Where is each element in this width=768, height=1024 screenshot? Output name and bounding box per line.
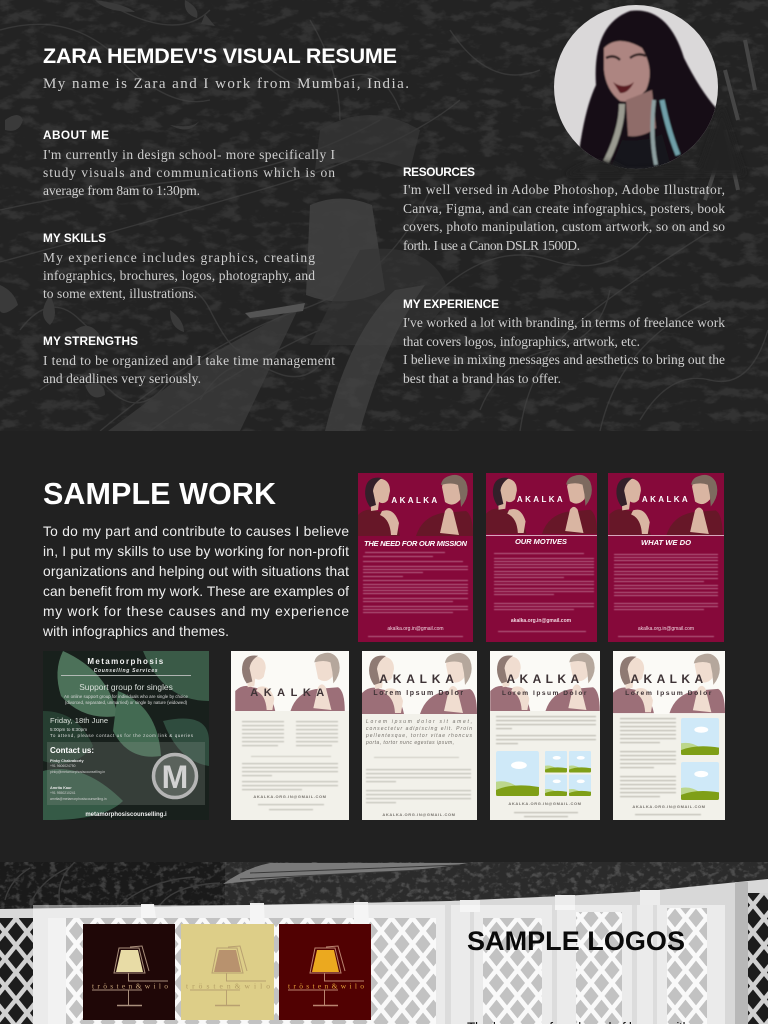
text block: my strengths: MY STRENGTHS (43, 334, 138, 348)
poster: our motives: OUR MOTIVES (515, 537, 567, 546)
poster: metamorphosis: Amrita Kaur (50, 786, 72, 790)
poster: cream layout 4: AKALKA (630, 672, 708, 686)
poster: cream layout 2: AKALKA (379, 672, 459, 686)
logo: deep red: trösten&wilo (288, 982, 364, 990)
poster: metamorphosis: 5:00pm to 6:30pm (50, 727, 87, 732)
text block: my strengths (43, 334, 335, 386)
poster: the need for our mission (358, 473, 473, 642)
panel: portrait photo (554, 5, 745, 175)
heading: sample work: SAMPLE WORK (43, 477, 276, 511)
poster: what we do: WHAT WE DO (641, 538, 691, 547)
text block: resources (403, 165, 725, 253)
poster: the need for our mission: AKALKA (391, 496, 440, 505)
text block: my skills: MY SKILLS (43, 231, 106, 245)
poster: cream layout 2: AKALKA.ORG.IN@GMAIL.COM (382, 812, 456, 817)
poster: cream layout 3: AKALKA (506, 672, 584, 686)
logo: beige (181, 924, 274, 1020)
text block: my experience: best that a brand has to offer. (403, 371, 561, 386)
poster: metamorphosis: metamorphosiscounselling.i (85, 812, 167, 818)
poster: cream layout 2: consectetur adipiscing elit. Proin (366, 726, 472, 732)
poster: metamorphosis: Counselling Services (94, 668, 158, 674)
text block: sample work description: in, I put my skills to use by working for non-profit (43, 544, 349, 559)
poster: cream layout 2: Lorem Ipsum Dolor (373, 690, 465, 697)
poster: cream layout 2 (362, 651, 477, 820)
poster: metamorphosis: amrita@metamorphosiscounselling.in (50, 797, 107, 801)
poster: cream layout 1 (231, 651, 349, 820)
poster: what we do: AKALKA (642, 495, 690, 504)
poster: metamorphosis: +91 9550210241 (50, 791, 76, 795)
text block: about me (43, 128, 336, 198)
text block: resources: forth. I use a Canon DSLR 1500D. (403, 238, 580, 253)
logo: beige: trösten&wilo (186, 982, 270, 990)
poster: metamorphosis: An online support group for individuals who are single by choice (64, 694, 189, 699)
poster: metamorphosis: (divorced, separated, unmarried) or single by nature (widowed) (65, 700, 188, 705)
poster: metamorphosis: Contact us: (50, 746, 94, 755)
poster: cream layout 3: Lorem Ipsum Dolor (502, 690, 588, 697)
text block: my experience (403, 297, 725, 386)
poster: cream layout 3 (490, 651, 600, 820)
text block: my experience: I believe in mixing messages and aesthetics to bring out the (403, 352, 725, 367)
text block: my skills: infographics, brochures, logos, photography, and (43, 268, 315, 283)
poster: our motives (486, 473, 597, 642)
text block: my experience: MY EXPERIENCE (403, 297, 499, 311)
heading: sample logos: SAMPLE LOGOS (467, 926, 685, 956)
poster: the need for our mission: akalka.org.in@gmail.com (387, 626, 444, 632)
text block: my strengths: and deadlines very seriously. (43, 371, 201, 386)
text block: about me: study visuals and communications which is on (43, 165, 335, 180)
logo: dark brown (83, 924, 175, 1020)
text block: about me: I'm currently in design school- more specifically I (43, 147, 336, 162)
poster: cream layout 3: AKALKA.ORG.IN@GMAIL.COM (508, 801, 582, 806)
poster: cream layout 2: pellentesque, tortor vitae rhoncus (365, 733, 472, 739)
text block: sample work description: can benefit from my work. These are examples of (43, 584, 349, 599)
text block: resources: RESOURCES (403, 165, 475, 179)
text block: my skills: My experience includes graphics, creating (43, 250, 315, 265)
poster: cream layout 1: AKALKA (250, 687, 330, 699)
poster: metamorphosis: Metamorphosis (87, 657, 165, 666)
text block: sample work description: my work for these causes and my experience (43, 604, 349, 619)
text block: my experience: that covers logos, infographics, artwork, etc. (403, 334, 640, 349)
text block: resources: Canva, Figma, and can create infographics, posters, book (403, 201, 725, 216)
poster: metamorphosis: M (162, 759, 188, 795)
text block: my skills: to some extent, illustrations. (43, 286, 197, 301)
poster: cream layout 2: porta, tortor nunc egestas ipsum, (365, 740, 454, 746)
panel: header background texture (0, 0, 768, 431)
text block: my skills (43, 231, 315, 301)
text block: my experience: I've worked a lot with branding, in terms of freelance work (403, 315, 725, 330)
poster: cream layout 2: Lorem ipsum dolor sit amet, (366, 719, 472, 725)
text block: my strengths: I tend to be organized and I take time management (43, 353, 335, 368)
fence body (0, 879, 768, 1024)
poster: metamorphosis: +91 9606024750 (50, 764, 76, 768)
text block: about me: ABOUT ME (43, 128, 109, 142)
translucent panel (33, 905, 725, 1024)
text block: sample work description: with infographics and themes. (42, 624, 229, 639)
text block: resources: covers, photo manipulation, custom artwork, so on and so (403, 219, 725, 234)
tagline: My name is Zara and I work from Mumbai, India. (43, 76, 409, 92)
text block: sample work description: To do my part and contribute to causes I believe (43, 524, 349, 539)
text block: sample work description (42, 524, 349, 639)
poster: the need for our mission: THE NEED FOR OUR MISSION (364, 539, 468, 548)
text block: resources: I'm well versed in Adobe Photoshop, Adobe Illustrator, (403, 182, 725, 197)
poster: our motives: akalka.org.in@gmail.com (511, 618, 572, 624)
poster: metamorphosis: pinky@metamorphosiscounselling.in (50, 770, 105, 774)
poster: cream layout 1: AKALKA.ORG.IN@GMAIL.COM (253, 794, 327, 799)
title: ZARA HEMDEV'S VISUAL RESUME (43, 44, 397, 68)
poster: cream layout 4: AKALKA.ORG.IN@GMAIL.COM (632, 804, 706, 809)
poster: metamorphosis: Friday, 18th June (50, 716, 108, 725)
text block: about me: average from 8am to 1:30pm. (43, 183, 200, 198)
text block: sample work description: organizations and helping out with situations that (43, 564, 349, 579)
poster: metamorphosis: To attend, please contact us for the zoom link & queries (50, 733, 194, 738)
poster: metamorphosis: Pinky Chakraborty (50, 759, 84, 763)
poster: cream layout 4 (613, 651, 725, 820)
panel: logos photo background (0, 862, 768, 1024)
poster: metamorphosis (43, 651, 209, 820)
poster: what we do: akalka.org.in@gmail.com (638, 626, 694, 632)
panel: sample work background (0, 431, 768, 862)
poster: metamorphosis: Support group for singles (79, 682, 173, 692)
logo: deep red (279, 924, 371, 1020)
poster: cream layout 4: Lorem Ipsum Dolor (625, 690, 713, 697)
poster: our motives: AKALKA (517, 495, 565, 504)
poster: what we do (608, 473, 724, 642)
logo: dark brown: trösten&wilo (92, 982, 168, 990)
